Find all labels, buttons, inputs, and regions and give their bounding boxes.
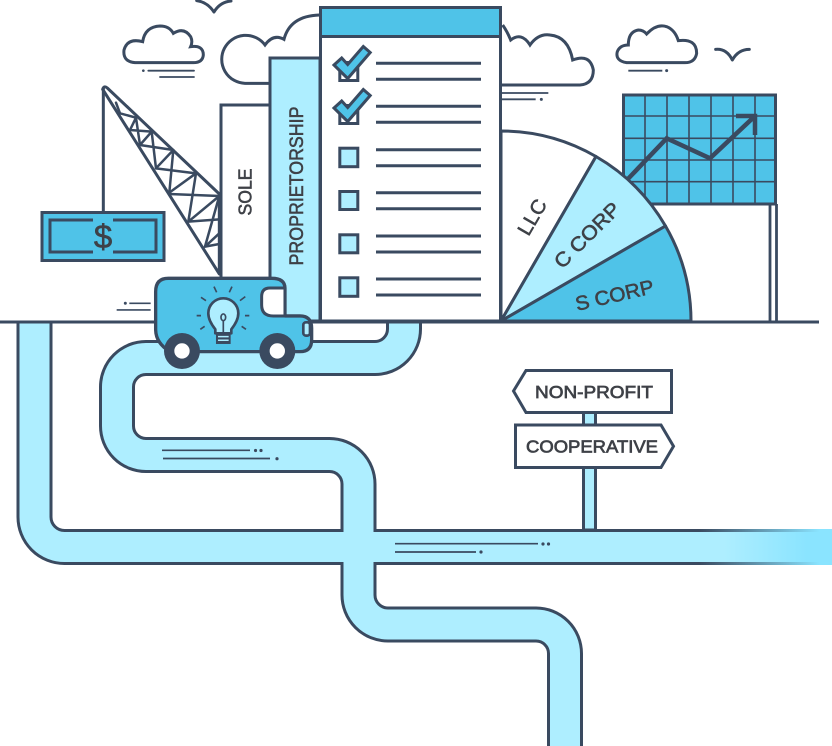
sign: cooperative bbox=[516, 425, 674, 468]
chart trend arrow bbox=[626, 116, 755, 181]
icon: light bulb bbox=[197, 287, 249, 344]
bird: right bbox=[716, 49, 749, 60]
sign: non-profit bbox=[514, 370, 672, 412]
building: proprietorship bbox=[270, 58, 320, 321]
sign: cooperative: COOPERATIVE bbox=[526, 436, 658, 456]
checklist document bbox=[320, 8, 500, 321]
crane hoist cable bbox=[99, 88, 108, 212]
wedge: LLC bbox=[501, 131, 596, 321]
truck speed lines bbox=[117, 302, 151, 310]
cloud: behind checklist bbox=[502, 25, 593, 101]
signpost bbox=[514, 370, 674, 530]
cloud: right bbox=[617, 26, 697, 72]
building: proprietorship: PROPRIETORSHIP bbox=[286, 106, 308, 266]
truck headlight bbox=[303, 322, 310, 336]
pipes: road network bbox=[34, 321, 832, 746]
road speed lines: main road bbox=[395, 542, 550, 554]
ground line bbox=[0, 320, 819, 324]
crane bbox=[103, 87, 219, 274]
road speed lines: upper road bbox=[162, 449, 279, 460]
checklist header bbox=[320, 8, 500, 36]
check mark 1 bbox=[334, 46, 370, 78]
money bill bbox=[42, 212, 164, 260]
truck wheel rear bbox=[164, 333, 200, 369]
cloud: far left bbox=[124, 26, 203, 77]
sign pole bbox=[584, 410, 596, 530]
wedge: S Corp: S CORP bbox=[573, 276, 656, 316]
wedge: LLC: LLC bbox=[514, 196, 552, 239]
building: sole: SOLE bbox=[234, 168, 256, 216]
truck window bbox=[262, 288, 285, 316]
pie wedge bbox=[501, 131, 691, 321]
dollar sign: $ bbox=[94, 218, 112, 255]
wedge: C Corp: C CORP bbox=[550, 198, 625, 273]
crane boom outline bbox=[103, 87, 219, 274]
wedge: S Corp bbox=[501, 226, 691, 321]
board legs bbox=[770, 204, 776, 321]
building: sole bbox=[221, 105, 270, 321]
sign: non-profit: NON-PROFIT bbox=[535, 382, 653, 402]
check mark 2 bbox=[334, 90, 370, 122]
cloud: behind buildings bbox=[222, 15, 319, 83]
truck wheel front bbox=[259, 333, 295, 369]
bird: top bbox=[197, 1, 231, 12]
checklist lines bbox=[376, 63, 481, 295]
chart board bbox=[623, 95, 776, 321]
wedge: C Corp bbox=[501, 156, 666, 321]
truck bbox=[156, 278, 312, 369]
bill inner border bbox=[50, 220, 156, 252]
truck body bbox=[156, 278, 312, 352]
checkboxes bbox=[340, 62, 358, 296]
crane truss bbox=[116, 103, 219, 247]
